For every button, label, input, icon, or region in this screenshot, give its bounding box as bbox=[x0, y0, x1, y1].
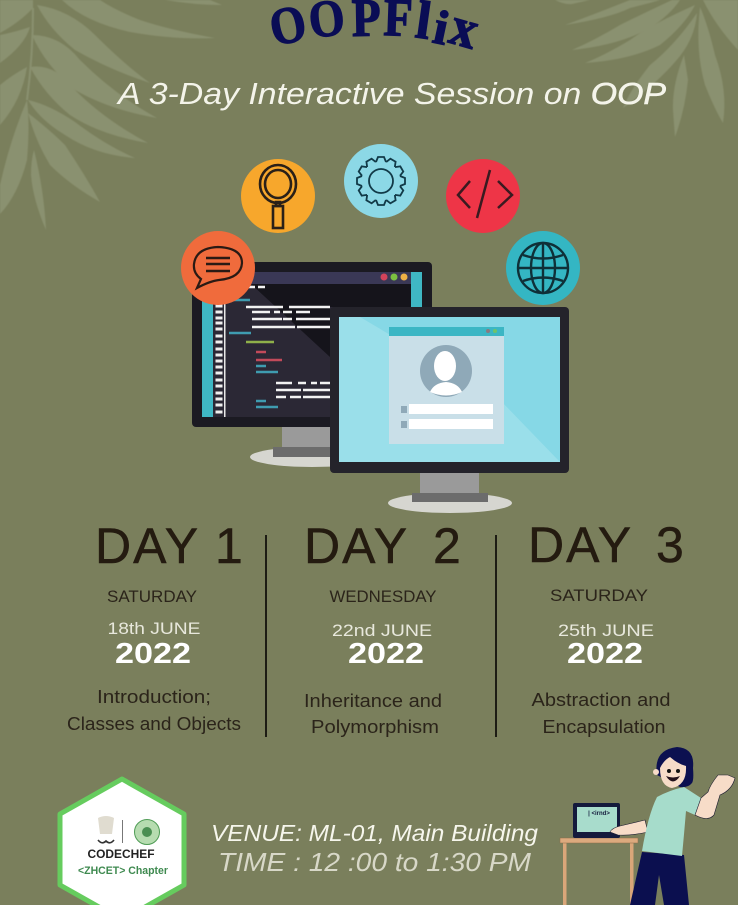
subtitle: A 3-Day Interactive Session on OOP bbox=[116, 76, 666, 111]
panel: day 1: Introduction; bbox=[97, 686, 211, 707]
panel: day 2: Inheritance and bbox=[304, 690, 442, 711]
icon: speech bubble bbox=[181, 231, 255, 305]
divider: day 2 and 3 bbox=[495, 535, 497, 737]
icon: gear bbox=[344, 144, 418, 218]
decoration: left palm leaf bbox=[0, 0, 222, 230]
panel: day 2 bbox=[304, 518, 463, 737]
panel: day 2: 2 bbox=[433, 518, 463, 574]
decoration: right palm leaf bbox=[555, 0, 738, 137]
panel: day 1 bbox=[67, 518, 245, 734]
panel: day 3: Abstraction and bbox=[532, 689, 670, 710]
panel: day 2: 22nd JUNE bbox=[332, 621, 432, 640]
title: OOPFlix bbox=[264, 0, 486, 61]
title: OOPFlix: i bbox=[429, 0, 454, 55]
panel: day 1: SATURDAY bbox=[107, 587, 197, 606]
icon: code brackets bbox=[446, 159, 520, 233]
panel: day 2: 2022 bbox=[348, 638, 424, 670]
panel: day 2: DAY bbox=[304, 518, 409, 574]
time: TIME : 12 :00 to 1:30 PM bbox=[218, 847, 531, 877]
panel: day 2: Polymorphism bbox=[311, 716, 439, 737]
panel: day 3: 25th JUNE bbox=[558, 621, 654, 640]
panel: day 3: 2022 bbox=[567, 638, 643, 670]
panel: day 1: 18th JUNE bbox=[108, 619, 200, 638]
panel: day 3: DAY bbox=[528, 517, 633, 573]
illustration: front monitor with login window bbox=[330, 307, 569, 513]
logo: CodeChef ZHCET chapter badge bbox=[60, 779, 184, 905]
icon: magnifying glass bbox=[241, 159, 315, 233]
panel: day 1: 2022 bbox=[115, 638, 191, 670]
panel: day 1: Classes and Objects bbox=[67, 713, 241, 734]
panel: day 1: DAY bbox=[95, 518, 200, 574]
divider: day 1 and 2 bbox=[265, 535, 267, 737]
logo: CodeChef ZHCET chapter badge: <ZHCET> Chapter bbox=[78, 865, 169, 877]
panel: day 3 bbox=[528, 517, 686, 737]
icon: globe bbox=[506, 231, 580, 305]
venue: VENUE: ML-01, Main Building bbox=[211, 820, 538, 846]
illustration: back monitor with code bbox=[192, 262, 432, 467]
panel: day 3: SATURDAY bbox=[550, 586, 648, 605]
panel: day 1: 1 bbox=[215, 518, 245, 574]
panel: day 3: 3 bbox=[656, 517, 686, 573]
panel: day 3: Encapsulation bbox=[542, 716, 666, 737]
panel: day 2: WEDNESDAY bbox=[330, 587, 436, 606]
illustration: person with laptop at desk bbox=[560, 747, 735, 905]
logo: CodeChef ZHCET chapter badge: CODECHEF bbox=[88, 847, 154, 861]
illustration: person with laptop at desk: | <irnd> bbox=[588, 811, 610, 817]
